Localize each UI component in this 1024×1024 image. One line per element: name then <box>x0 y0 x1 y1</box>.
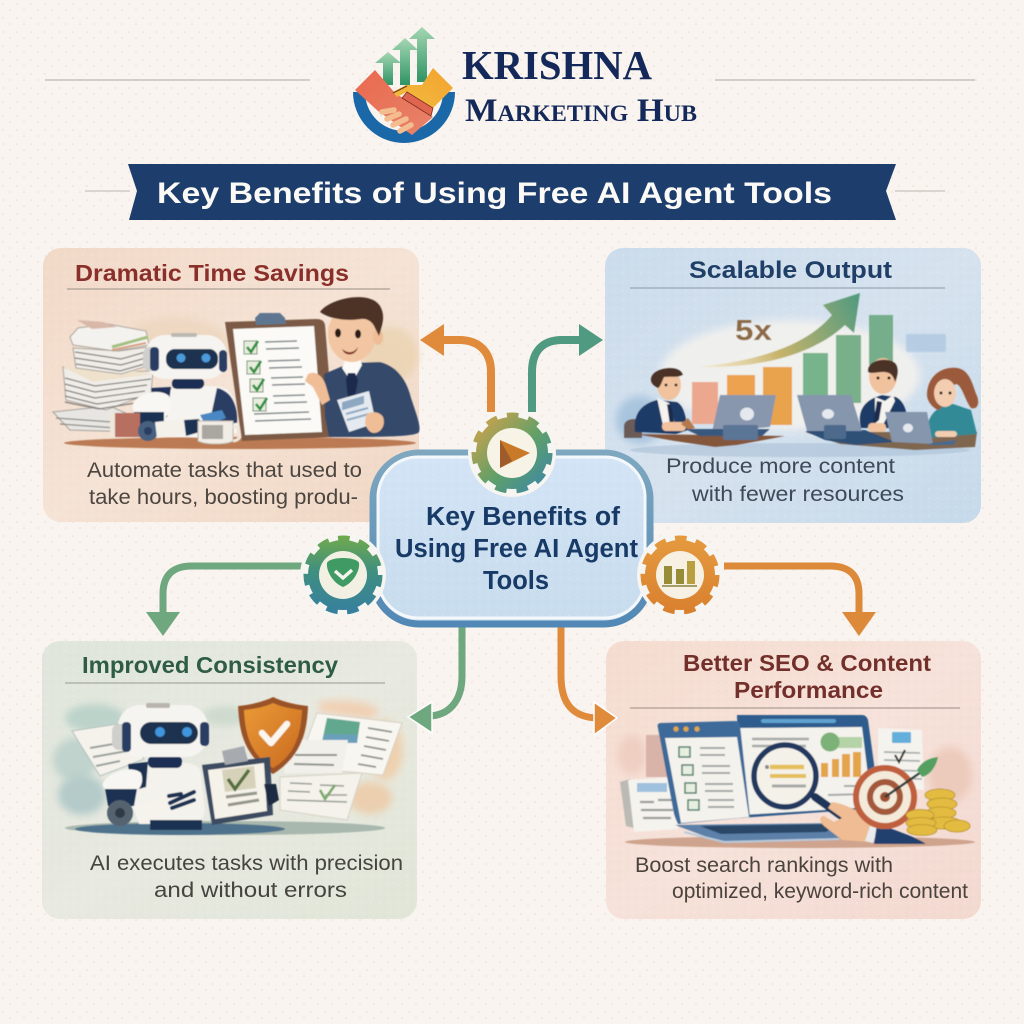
illustration: team growing output <box>616 293 978 457</box>
icon: bar chart gear <box>637 532 723 618</box>
panel description <box>666 455 904 506</box>
robot <box>103 703 209 830</box>
panel description <box>90 852 403 902</box>
5x label: 5x <box>735 315 772 347</box>
panel description <box>635 854 968 903</box>
bar chart <box>692 315 893 425</box>
panel description <box>87 459 362 509</box>
hand and sleeve <box>820 802 926 844</box>
panel heading: Dramatic Time Savings <box>75 260 349 286</box>
central heading: Key Benefits of <box>426 503 621 531</box>
logo: Krishna Marketing Hub <box>355 27 697 137</box>
panel description: take hours, boosting produ- <box>89 486 358 509</box>
panel description: and without errors <box>154 879 347 902</box>
title banner <box>128 164 896 220</box>
panel: improved consistency <box>42 641 417 919</box>
left businessman <box>624 368 695 438</box>
arrow: to scalable output <box>532 324 603 412</box>
illustration: robot, clipboard and businessman <box>53 297 420 449</box>
illustration: laptop, magnifier, target and coins <box>618 715 975 848</box>
document with check, right <box>878 728 924 790</box>
right laptop and desk <box>797 395 977 450</box>
shield icon <box>238 697 308 774</box>
panel heading: Improved Consistency <box>82 652 338 678</box>
icon: play gear <box>468 409 556 497</box>
target with arrow <box>853 757 938 829</box>
central hub box <box>373 453 650 624</box>
panel description: with fewer resources <box>691 483 904 506</box>
arrow: to SEO, from right gear <box>724 566 876 636</box>
woman <box>927 368 978 438</box>
clipboard <box>225 313 334 441</box>
panel description: Produce more content <box>666 455 895 478</box>
arrow: to improved consistency, from left gear <box>146 566 302 636</box>
second businessman <box>860 358 907 432</box>
magnifying glass <box>754 745 843 817</box>
clipboard with check <box>202 746 279 825</box>
background document left <box>72 723 144 776</box>
left laptop and desk <box>635 395 785 447</box>
panel description: optimized, keyword-rich content <box>672 880 968 903</box>
documents right <box>280 713 402 820</box>
panel heading: Scalable Output <box>689 257 892 284</box>
robot <box>110 333 237 441</box>
panel: scalable output <box>605 248 981 523</box>
banner heading: Key Benefits of Using Free AI Agent Tools <box>157 177 832 210</box>
illustration: robot with clipboard, shield and documents <box>53 697 403 835</box>
gold coins <box>906 789 970 836</box>
panel heading: Better SEO & Content <box>683 650 931 676</box>
arrow: centre to SEO <box>561 625 617 735</box>
panel: dramatic time savings <box>43 248 420 522</box>
panel description: AI executes tasks with precision <box>90 852 403 875</box>
background document left <box>620 777 678 832</box>
front laptop <box>885 412 957 445</box>
panel heading: Performance <box>734 677 883 703</box>
paper stacks <box>53 320 153 432</box>
panel: better SEO and content performance <box>606 641 981 919</box>
arrow: centre to improved consistency <box>408 625 462 733</box>
central heading <box>395 503 638 595</box>
businessman <box>305 297 420 437</box>
laptop <box>658 715 880 843</box>
logo icon: growth arrows and handshake <box>355 27 453 137</box>
coffee mug <box>198 421 241 444</box>
central heading: Using Free AI Agent <box>395 535 638 563</box>
central heading: Tools <box>483 567 549 595</box>
arrow: to dramatic time savings <box>420 324 491 412</box>
logo wordmark line 2: Marketing Hub <box>465 93 697 129</box>
logo wordmark line 1: KRISHNA <box>462 42 652 88</box>
panel heading <box>683 650 931 703</box>
icon: shield check gear <box>300 532 386 618</box>
growth arrow <box>697 293 860 367</box>
panel description: Automate tasks that used to <box>87 459 362 482</box>
panel description: Boost search rankings with <box>635 854 893 877</box>
